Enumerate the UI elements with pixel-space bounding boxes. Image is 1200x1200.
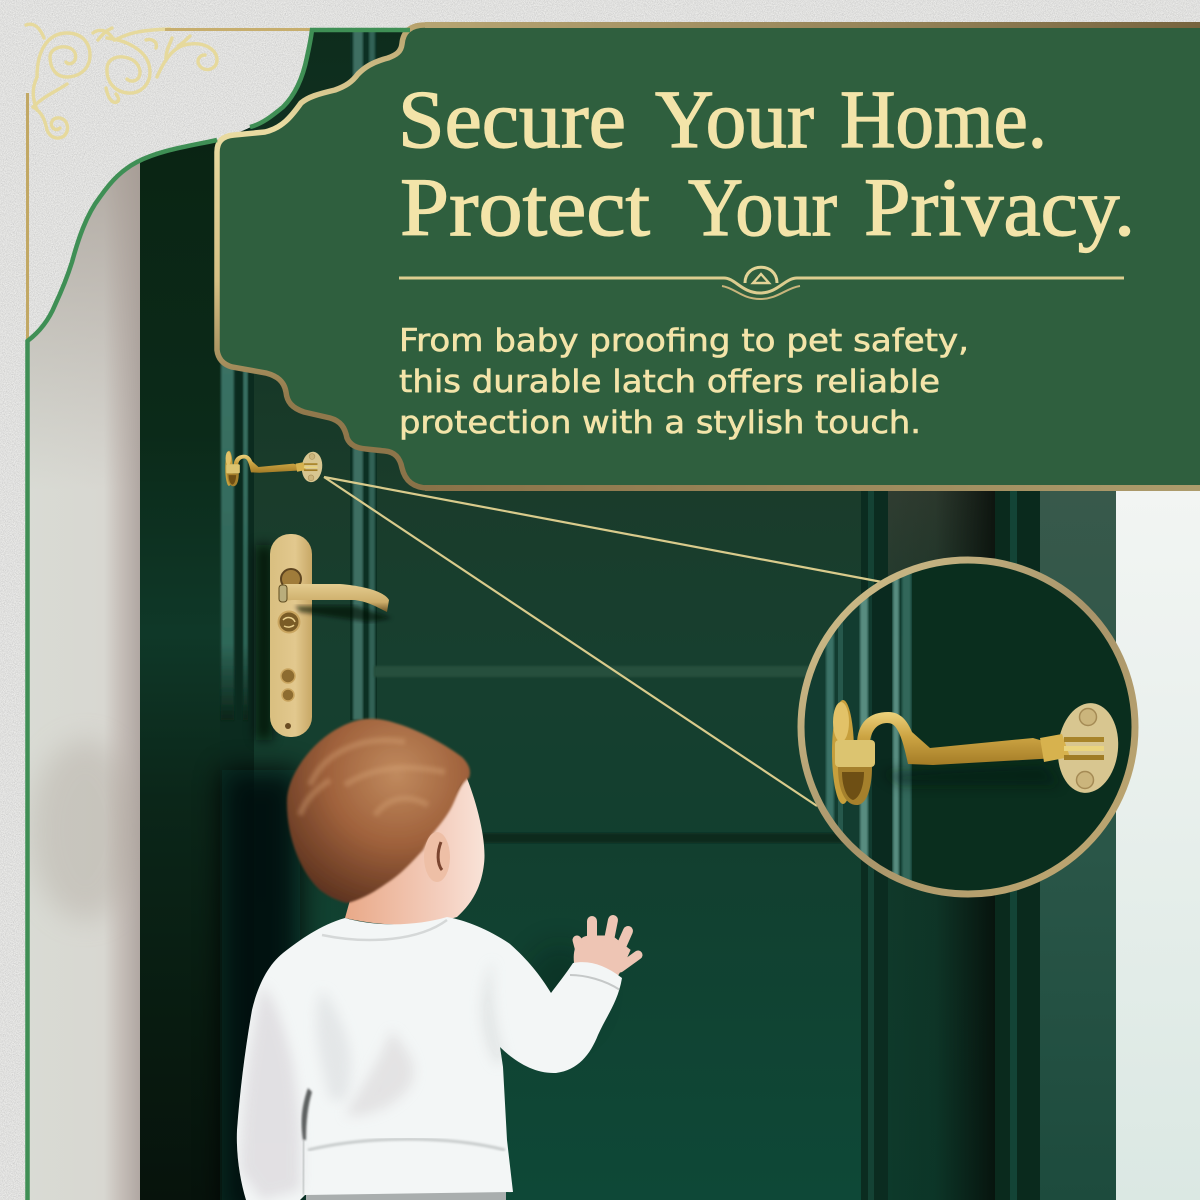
neck and face <box>345 776 485 925</box>
wall left <box>27 100 140 1200</box>
zoom lines <box>324 477 882 806</box>
subtitle text <box>399 323 969 441</box>
frame line: top gold border <box>165 28 312 31</box>
rosette top <box>281 569 301 589</box>
title: Your <box>688 161 837 253</box>
title: Your <box>655 73 814 165</box>
title: Protect <box>400 161 650 253</box>
right moulding <box>861 490 1040 1200</box>
title: Home. <box>840 73 1047 165</box>
photo outline: green border <box>28 30 410 1200</box>
title: Secure <box>398 73 626 165</box>
lever <box>278 584 389 612</box>
hair highlights <box>300 740 445 815</box>
subtitle text: this durable latch offers reliable <box>399 364 940 400</box>
child <box>230 719 638 1200</box>
rosette <box>278 612 300 632</box>
door handle <box>256 534 392 740</box>
banner panel <box>217 22 1200 491</box>
right door reveal <box>886 490 996 1200</box>
door <box>240 32 861 1200</box>
magnifier circle <box>798 556 1138 898</box>
trousers <box>306 1190 506 1200</box>
ear <box>424 832 450 882</box>
right wall <box>1116 490 1200 1200</box>
subtitle text: From baby proofing to pet safety, <box>399 323 969 359</box>
banner top edge <box>425 22 1200 28</box>
hand <box>574 920 638 985</box>
sweater <box>230 905 630 1200</box>
panel lines <box>374 666 861 843</box>
left moulding <box>220 30 254 1200</box>
wall top shadow <box>30 164 140 432</box>
small latch on door <box>225 451 324 486</box>
wall mid shadow <box>30 739 126 921</box>
lever boss <box>279 585 287 602</box>
handle shadow <box>256 545 272 740</box>
corner ornament: gold scrollwork <box>26 24 217 138</box>
circle ring <box>801 560 1135 894</box>
keyhole <box>285 723 291 729</box>
screw <box>282 689 294 701</box>
title: Privacy. <box>864 161 1135 253</box>
shadow around child <box>222 770 596 1200</box>
subtitle text: protection with a stylish touch. <box>399 405 921 441</box>
centre moulding <box>350 30 377 720</box>
backplate <box>270 534 312 737</box>
hair <box>287 719 470 903</box>
divider ornament <box>386 267 1140 299</box>
title <box>398 73 1135 253</box>
right frame <box>1038 490 1116 1200</box>
screw <box>281 669 295 683</box>
lever shadow <box>295 606 392 622</box>
circle interior <box>812 564 1132 890</box>
banner shape <box>217 25 1200 488</box>
frame line: left gold border <box>26 93 29 340</box>
banner bottom edge <box>425 485 1200 491</box>
door frame left <box>140 140 220 1200</box>
